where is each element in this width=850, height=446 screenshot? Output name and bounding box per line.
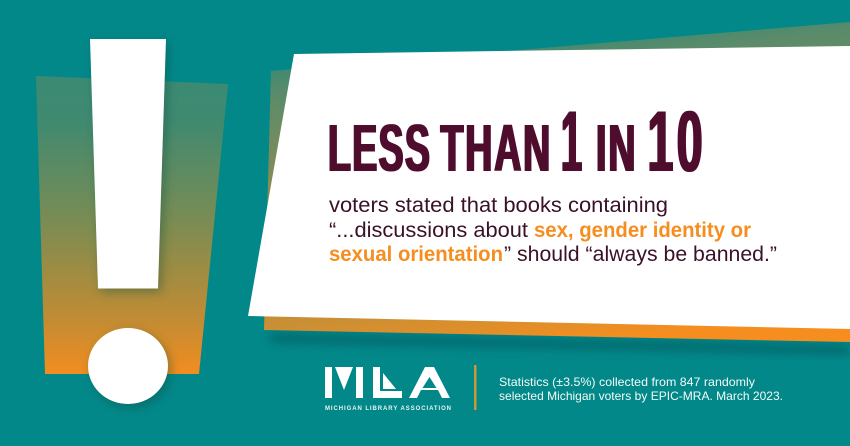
gradient backing shape bbox=[264, 22, 850, 342]
white panel bbox=[248, 46, 850, 329]
body text: sexual orientation bbox=[329, 243, 503, 266]
body text: voters stated that books containing bbox=[329, 194, 668, 217]
logo wordmark: MICHIGAN LIBRARY ASSOCIATION bbox=[325, 406, 451, 412]
icon: exclamation mark bbox=[36, 39, 228, 408]
headline: THAN bbox=[440, 111, 550, 186]
exclamation dot bbox=[88, 328, 168, 404]
shadow under orange strip bbox=[270, 334, 850, 354]
logo letter M bbox=[325, 367, 363, 398]
headline bbox=[328, 93, 703, 190]
headline: 10 bbox=[648, 93, 703, 190]
headline: LESS bbox=[328, 111, 430, 186]
divider bar bbox=[474, 365, 476, 410]
logo letter A bbox=[409, 367, 450, 398]
body text: sex, gender identity or bbox=[534, 219, 751, 242]
logo letter L bbox=[373, 367, 402, 398]
source note: Statistics (±3.5%) collected from 847 randomly bbox=[499, 375, 755, 389]
exclamation bar bbox=[90, 39, 166, 288]
body text bbox=[329, 194, 777, 266]
logo: Michigan Library Association bbox=[325, 367, 451, 412]
headline: IN bbox=[596, 111, 635, 186]
body text: ” should “always be banned.” bbox=[504, 243, 777, 266]
exclamation shadow bbox=[91, 42, 171, 408]
body text: “...discussions about bbox=[329, 219, 528, 242]
headline: 1 bbox=[561, 95, 582, 190]
source note: selected Michigan voters by EPIC-MRA. March 2023. bbox=[499, 389, 783, 403]
source note bbox=[499, 375, 783, 403]
gradient backing shape bbox=[36, 76, 228, 374]
panel: message bbox=[248, 22, 850, 354]
